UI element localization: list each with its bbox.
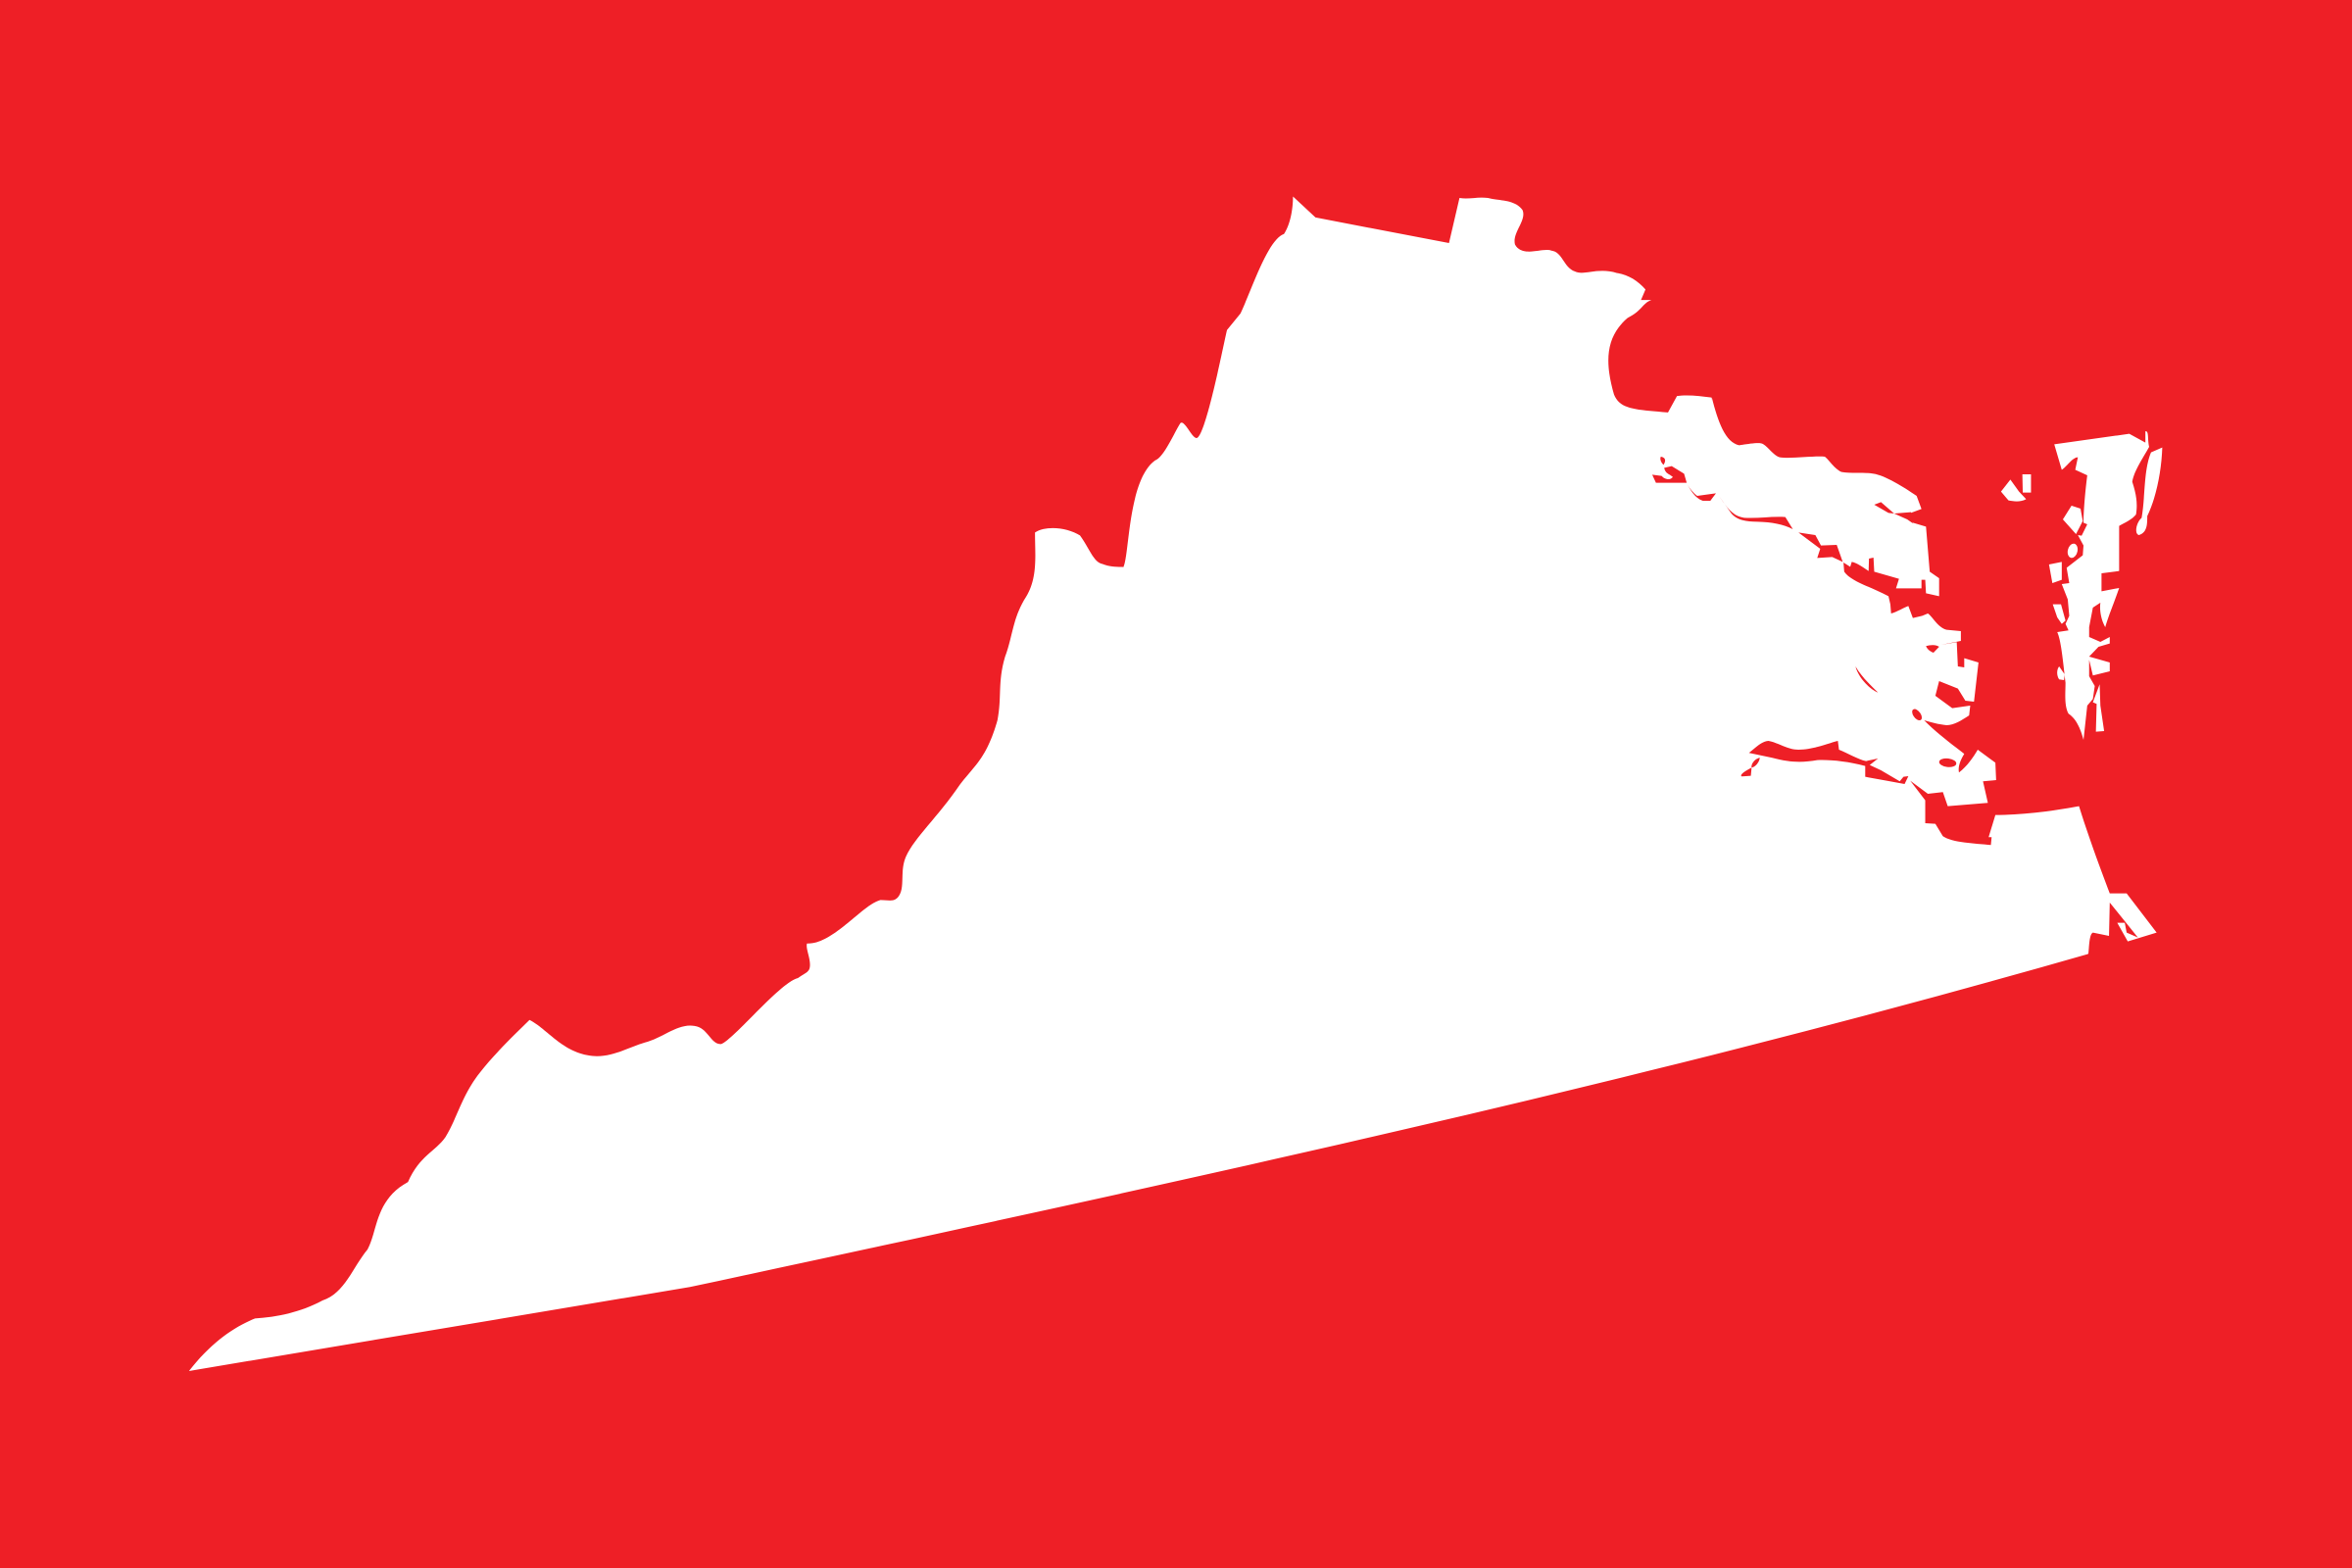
bay island west bbox=[2001, 479, 2026, 502]
James river bbox=[1749, 741, 1908, 784]
upper creek inlet bbox=[1652, 466, 1687, 483]
barrier island south bbox=[2093, 684, 2104, 732]
James river drop lower bbox=[1741, 767, 1751, 776]
western mainland bbox=[189, 197, 2088, 1371]
shore sliver island bbox=[2057, 666, 2065, 680]
marsh square island bbox=[2049, 562, 2062, 583]
barrier island north bbox=[2136, 448, 2162, 535]
river continuation bbox=[1798, 532, 1842, 562]
eastern mainland and Tidewater coast bbox=[1675, 398, 2157, 1032]
bay island east bbox=[2023, 474, 2031, 493]
interior lake sliver bbox=[1855, 666, 1878, 693]
Rappahannock river bbox=[1719, 496, 1792, 529]
small northern neck inlet bbox=[1874, 502, 1894, 514]
Tangier island upper bbox=[2063, 506, 2082, 534]
map: Virginia state silhouette bbox=[189, 197, 2162, 1371]
marsh wedge island bbox=[2053, 605, 2066, 624]
eastern shore peninsula bbox=[2054, 431, 2149, 740]
Delmarva eastern shore bbox=[2001, 431, 2162, 740]
rivers and inlets cut into the mainland bbox=[1652, 457, 1957, 784]
northern neck bay bbox=[1894, 513, 1913, 523]
upper creek drop bbox=[1660, 457, 1665, 465]
James river drop upper bbox=[1751, 758, 1760, 767]
small oval pond bbox=[1910, 708, 1924, 721]
creek sliver bbox=[1688, 484, 1716, 501]
tidewater oval pond bbox=[1938, 758, 1957, 768]
marsh oval island bbox=[2067, 543, 2079, 559]
peninsula pond bbox=[1926, 645, 1939, 653]
